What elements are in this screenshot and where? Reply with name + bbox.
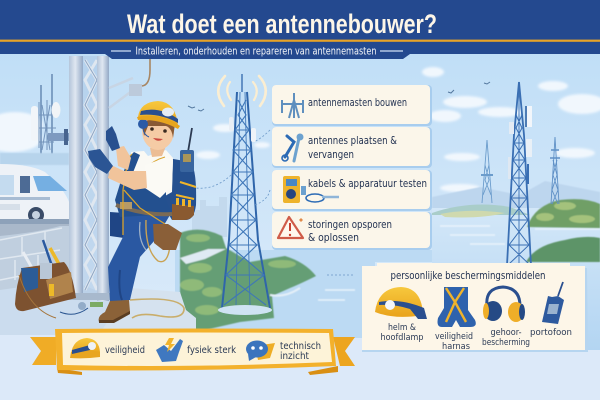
quality: fysiek sterk: [156, 338, 236, 362]
small left antenna tower: [31, 74, 70, 158]
shirt and dungarees: [131, 150, 173, 200]
distant shore left: [0, 153, 69, 165]
distant tower left: [481, 140, 493, 203]
icon: mast: [282, 93, 304, 118]
front leg: [108, 215, 170, 302]
item: portofoon: [530, 282, 572, 338]
item: gehoorbescherming: [482, 287, 530, 348]
green hills middle: [180, 230, 316, 332]
card: storingen: [272, 212, 432, 250]
reaching arm: [108, 165, 147, 190]
worker: [88, 101, 196, 323]
big tower right: [507, 82, 532, 265]
item: harnas: [435, 287, 476, 352]
item: harnas: harnas: [442, 342, 470, 352]
lifted arm: [116, 146, 131, 170]
item: gehoorbescherming: bescherming: [482, 338, 530, 348]
panel heading: persoonlijke beschermingsmiddelen: [390, 270, 546, 282]
van: [0, 164, 69, 224]
item: gehoorbescherming: gehoor-: [490, 328, 522, 338]
right green islands: [526, 199, 600, 262]
quality: veiligheid: veiligheid: [105, 345, 145, 356]
banner: kwaliteiten: [30, 328, 355, 375]
task list: [272, 85, 432, 250]
card: bouwen: antennemasten bouwen: [308, 97, 407, 109]
quality: technisch inzicht: technisch: [280, 341, 321, 352]
head: [150, 146, 166, 157]
card: testen: kabels & apparatuur testen: [308, 178, 427, 190]
item: portofoon: portofoon: [530, 328, 572, 338]
item: helm: hoofdlamp: [380, 333, 424, 343]
icon: wrenches: [282, 134, 304, 161]
card: plaatsen: [272, 127, 432, 168]
panel: persoonlijke beschermingsmiddelen: [362, 263, 588, 352]
boot: [99, 300, 130, 322]
card: plaatsen: antennes plaatsen &: [308, 135, 397, 147]
quality: technisch inzicht: inzicht: [280, 351, 309, 362]
card: bouwen: [272, 85, 432, 126]
birds: [188, 82, 490, 111]
stone wall and ground: [0, 224, 196, 335]
central tower: [196, 74, 355, 315]
tool pouch: [153, 224, 182, 250]
distant city: [192, 197, 227, 237]
quality: veiligheid: [70, 338, 145, 358]
quality: technisch inzicht: [246, 340, 321, 362]
item: helm: helm &: [388, 323, 416, 333]
quality: fysiek sterk: fysiek sterk: [187, 345, 236, 356]
card: storingen: storingen opsporen: [308, 219, 392, 231]
header band: [0, 0, 600, 59]
item: helm: [375, 287, 427, 343]
main steel tower: [68, 56, 150, 301]
backpack: [165, 128, 196, 220]
icon: multimeter and cable: [283, 176, 339, 203]
item: harnas: veiligheid: [435, 332, 473, 342]
distant tower right: [550, 137, 560, 204]
card: plaatsen: vervangen: [308, 149, 354, 161]
subtitle: Installeren, onderhouden en repareren van antennemasten: [136, 46, 376, 58]
tool bag: [15, 240, 103, 318]
title: Wat doet een antennebouwer?: [127, 9, 437, 39]
icon: warning: [278, 217, 303, 238]
harness and belt: [116, 165, 172, 262]
rear leg: [110, 212, 124, 238]
card: storingen: & oplossen: [308, 232, 359, 244]
card: testen: [272, 170, 432, 211]
helmet: [138, 101, 178, 126]
sleeve: [145, 158, 173, 198]
